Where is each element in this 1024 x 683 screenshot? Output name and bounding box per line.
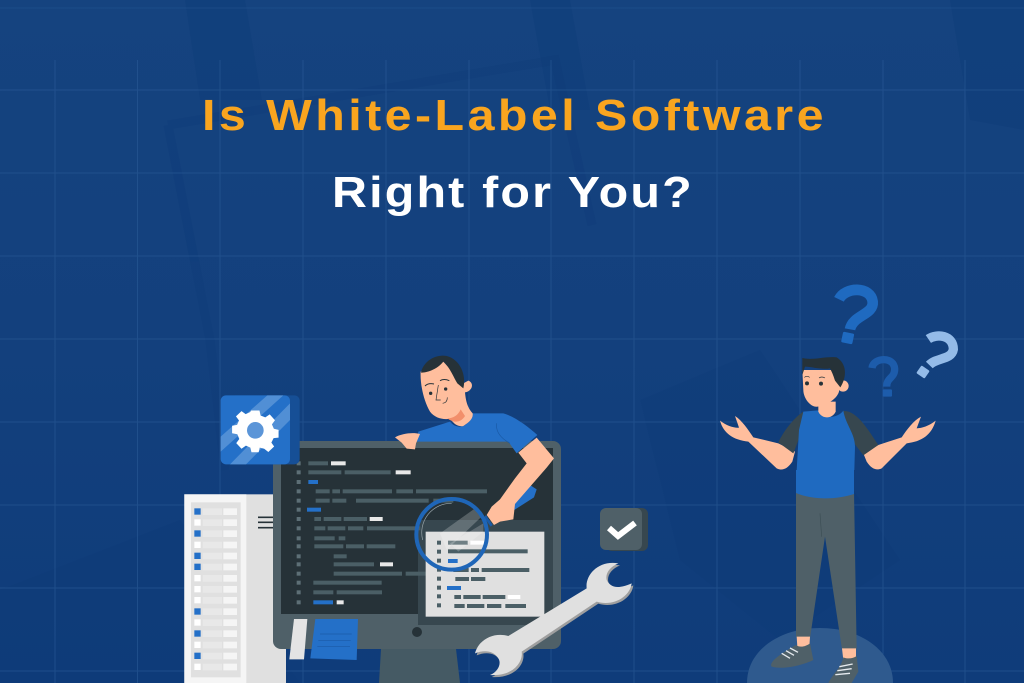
title: line 1: Is White-Label Software — [202, 90, 824, 140]
question marks — [839, 290, 953, 397]
person at monitor: hand and tool — [395, 433, 554, 527]
hand on monitor — [395, 433, 420, 449]
document panel on screen — [426, 532, 544, 617]
wrench — [475, 563, 633, 677]
shoes — [771, 643, 813, 668]
server document — [184, 494, 286, 683]
legs — [796, 492, 857, 649]
title: line 2: Right for You? — [332, 167, 692, 217]
icon: check mark — [609, 523, 635, 536]
icon: gear — [232, 411, 279, 452]
code lines on screen — [297, 461, 487, 604]
sleeves — [778, 412, 803, 453]
confused person: shirt lower — [796, 470, 854, 498]
ankles — [797, 637, 856, 660]
check tile — [600, 508, 648, 551]
person at monitor: head — [421, 356, 473, 426]
icon: light question mark — [928, 336, 953, 365]
monitor — [273, 441, 561, 649]
arm — [487, 438, 554, 525]
icon: large question mark — [839, 290, 873, 329]
monitor stand — [379, 649, 460, 683]
confused person: legs and shoes — [771, 492, 858, 683]
tool handle — [508, 485, 537, 512]
neck and head — [818, 402, 836, 417]
magnifying glass — [416, 499, 487, 570]
sticky notes — [289, 619, 358, 660]
icon: medium question mark — [872, 360, 895, 387]
person at monitor: shirt — [417, 413, 537, 453]
confused person: upper body — [720, 357, 936, 470]
gear tile — [221, 395, 300, 464]
pedestal — [747, 628, 893, 683]
shirt — [797, 410, 855, 470]
arms — [720, 416, 795, 469]
